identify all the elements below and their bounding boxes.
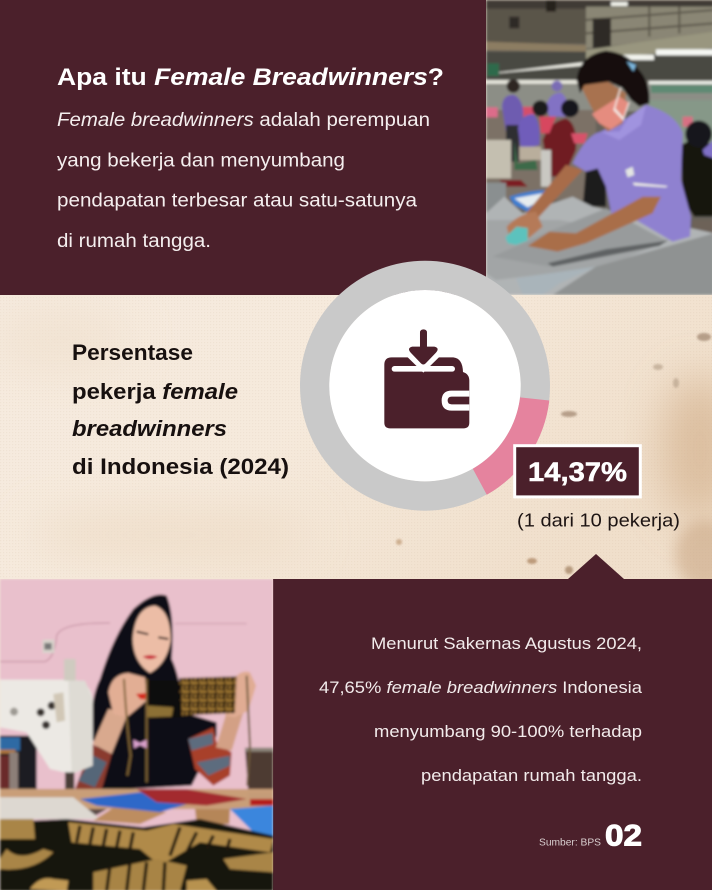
explanatory text block: pendapatan rumah tangga. — [421, 766, 642, 785]
heading: percentage of female breadwinner workers: Persentase — [72, 340, 193, 365]
photo: woman holding batik mask — [0, 579, 273, 890]
fabrics — [80, 792, 193, 812]
heading: percentage of female breadwinner workers: di Indonesia (2024) — [72, 454, 289, 479]
page number: 02 — [605, 820, 642, 852]
caption: 1 of 10 workers: (1 dari 10 pekerja) — [517, 510, 680, 530]
explanatory text block — [319, 634, 643, 785]
source note: Sumber: BPS — [539, 838, 601, 848]
callout: 14,37%: 14,37% — [528, 457, 627, 487]
definition text block: pendapatan terbesar atau satu-satunya — [57, 190, 417, 212]
right side table — [245, 748, 273, 792]
panel: paper background — [0, 295, 712, 590]
callout: 14,37% — [515, 446, 640, 497]
photo: garment factory worker — [486, 0, 712, 295]
definition text block: di rumah tangga. — [57, 231, 211, 252]
heading: percentage of female breadwinner workers: pekerja female — [72, 379, 238, 404]
definition text block — [57, 110, 430, 252]
heading: percentage of female breadwinner workers — [72, 340, 289, 479]
head — [581, 81, 626, 132]
table — [0, 789, 273, 809]
worker shirt — [573, 105, 691, 242]
heading: percentage of female breadwinner workers: breadwinners — [72, 416, 227, 441]
piles and blue tray — [486, 183, 506, 213]
sponge — [505, 227, 528, 245]
sleeves — [75, 744, 112, 790]
panel: bottom dark text block — [273, 579, 712, 890]
definition text block: Female breadwinners adalah perempuan — [57, 110, 430, 131]
sewing machine — [0, 680, 93, 774]
hijab and body — [91, 595, 217, 791]
donut chart: 14,37% — [315, 275, 549, 496]
background workers — [502, 95, 523, 137]
explanatory text block: Menurut Sakernas Agustus 2024, — [371, 634, 642, 653]
table fabric — [486, 197, 712, 295]
batik mask — [147, 681, 182, 717]
explanatory text block: 47,65% female breadwinners Indonesia — [319, 678, 643, 697]
icon: wallet with down arrow — [384, 329, 469, 428]
title: Apa itu Female Breadwinners ? — [57, 64, 444, 91]
face — [133, 606, 171, 673]
definition text block: yang bekerja dan menyumbang — [57, 150, 345, 172]
left stand — [0, 736, 37, 789]
pointer triangle — [568, 554, 624, 579]
panel: top dark text block — [0, 0, 486, 295]
worker arms — [526, 165, 583, 220]
arms and hands — [93, 709, 128, 754]
explanatory text block: menyumbang 90-100% terhadap — [374, 722, 642, 741]
